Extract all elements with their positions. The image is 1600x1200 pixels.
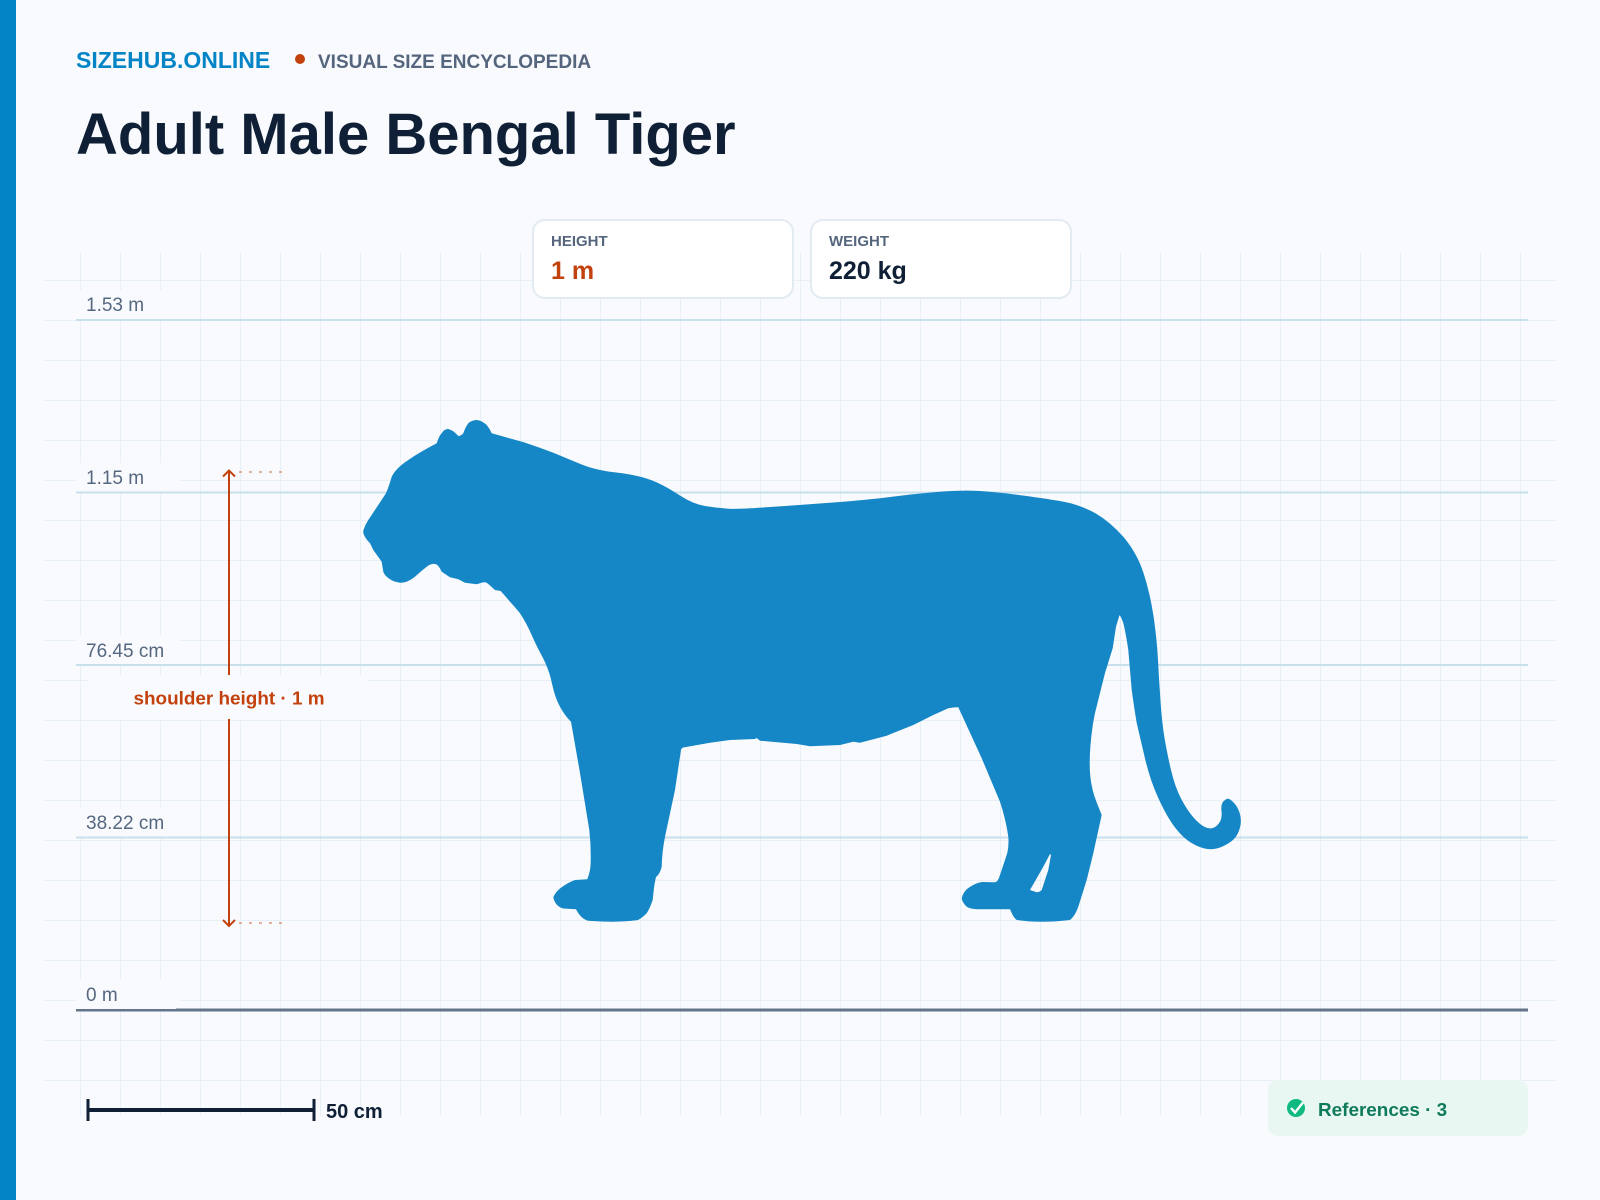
line: 38.22 cm (76, 808, 1528, 838)
stat card: height (533, 220, 793, 298)
line: 1.53 m: 1.53 m (86, 295, 144, 316)
brand dot (295, 54, 305, 64)
stat card: weight: WEIGHT (829, 233, 889, 250)
stat card: height: 1 m (551, 257, 594, 285)
scale bar (86, 1099, 383, 1123)
arrowhead: bottom (223, 920, 235, 926)
left accent bar (0, 0, 16, 1200)
tiger silhouette (363, 420, 1241, 922)
references badge: References · 3 (1318, 1100, 1447, 1121)
dotted tick: bottom (239, 922, 283, 924)
stat card: height: HEIGHT (551, 233, 608, 250)
line: 1.53 m (76, 290, 1528, 321)
title: Adult Male Bengal Tiger (76, 102, 736, 167)
references badge (1268, 1080, 1528, 1136)
dotted tick: top (239, 471, 283, 473)
line: 76.45 cm: 76.45 cm (86, 641, 164, 662)
dimension label: shoulder height · 1 m (133, 688, 325, 710)
stat card: weight: 220 kg (829, 257, 907, 285)
line: 38.22 cm: 38.22 cm (86, 813, 164, 834)
icon: check circle (1287, 1099, 1305, 1117)
stat card: weight (811, 220, 1071, 298)
line: 1.15 m: 1.15 m (86, 468, 144, 489)
line: 1.15 m (76, 463, 1528, 494)
header: brand line (76, 47, 591, 73)
brand name: SIZEHUB.ONLINE (76, 47, 270, 73)
dimension label (89, 675, 368, 719)
shoulder height dimension (89, 470, 368, 926)
arrow line (228, 471, 230, 925)
arrowhead: top (223, 470, 235, 476)
scale bar: 50 cm (326, 1101, 383, 1123)
reference height lines (76, 290, 1528, 1012)
line: 76.45 cm (76, 635, 1528, 666)
baseline: 0 m: 0 m (86, 985, 118, 1006)
brand tagline: VISUAL SIZE ENCYCLOPEDIA (318, 52, 591, 73)
baseline: 0 m (76, 980, 1528, 1012)
